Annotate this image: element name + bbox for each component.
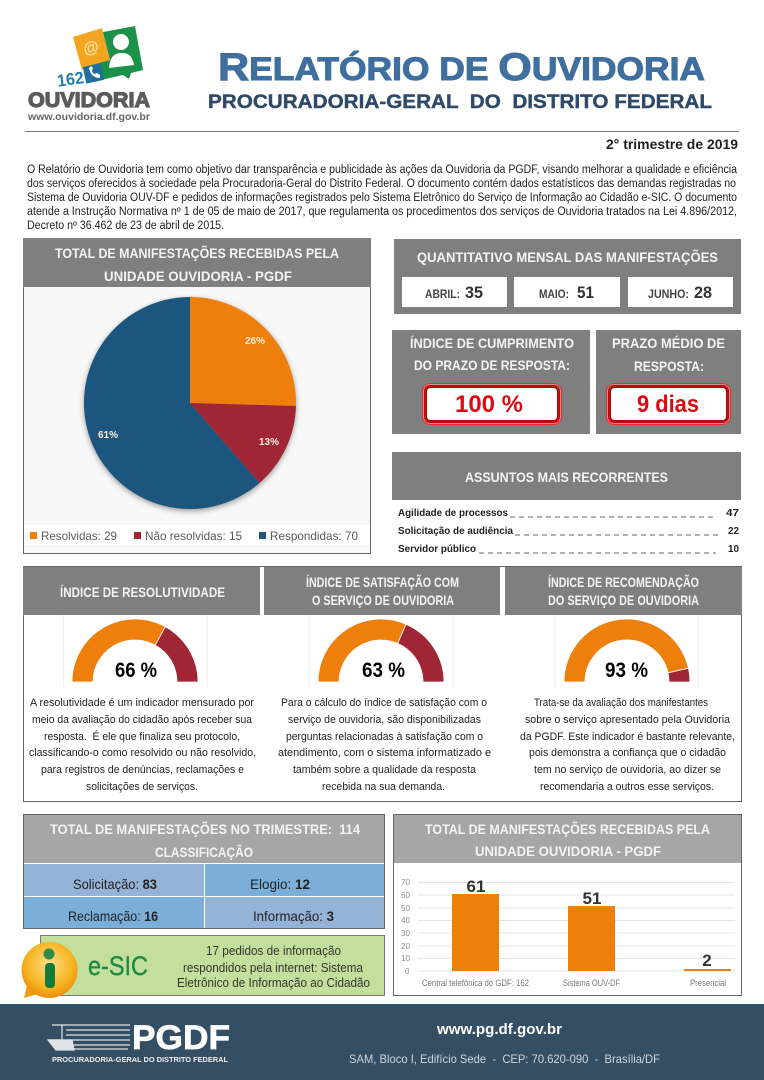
icon: PGDF building bbox=[48, 1025, 130, 1050]
panel: recurring subjects: 47 bbox=[726, 508, 740, 519]
panel: bar chart by channel: TOTAL DE MANIFESTAÇÕES RECEBIDAS PELA bbox=[425, 820, 710, 837]
text: resolution description: solicitações de serviços. bbox=[86, 781, 198, 793]
footer: SAM, Bloco I, Edifício Sede - CEP: 70.620-090 - Brasília/DF bbox=[349, 1052, 660, 1066]
panel: recommendation index: DO SERVIÇO DE OUVIDORIA bbox=[548, 592, 699, 608]
panel: quarter total and classification bbox=[24, 814, 384, 928]
panel: monthly quantity: 35 bbox=[465, 283, 483, 302]
panel: recommendation index bbox=[505, 567, 742, 793]
panel: average response time: RESPOSTA: bbox=[634, 358, 704, 374]
panel: satisfaction index: ÍNDICE DE SATISFAÇÃO COM bbox=[306, 573, 459, 590]
panel: deadline compliance: ÍNDICE DE CUMPRIMENTO bbox=[410, 335, 574, 351]
y axis labels: 40 bbox=[401, 916, 410, 925]
y axis labels: 0 bbox=[405, 967, 410, 976]
bar values bbox=[467, 877, 712, 970]
text: resolution description: meio da avaliação do cidadão após receber sua bbox=[32, 714, 253, 726]
text: e-SIC requests bbox=[177, 944, 370, 990]
footer: PGDF bbox=[132, 1019, 230, 1057]
panel: resolution index: 66 % bbox=[115, 659, 157, 682]
panel: pie chart of manifestations bbox=[23, 238, 371, 554]
panel: bar chart by channel: UNIDADE OUVIDORIA - PGDF bbox=[475, 843, 661, 859]
text: e-SIC requests: 17 pedidos de informação bbox=[206, 944, 341, 958]
x axis labels: Presencial bbox=[690, 978, 726, 988]
text: recommendation description: Trata-se da avaliação dos manifestantes bbox=[534, 697, 708, 709]
logo: Ouvidoria 162 bbox=[27, 26, 150, 123]
bar values: 2 bbox=[702, 951, 712, 970]
text: e-SIC requests: Eletrônico de Informação ao Cidadão bbox=[177, 976, 370, 990]
text: satisfaction description bbox=[278, 697, 491, 793]
text: resolution description: resposta. É ele que finaliza seu protocolo, bbox=[44, 730, 240, 743]
subtitle: PROCURADORIA-GERAL DO DISTRITO FEDERAL bbox=[208, 92, 712, 113]
pie legend bbox=[24, 525, 370, 545]
logo: Ouvidoria 162: www.ouvidoria.df.gov.br bbox=[27, 111, 150, 123]
pie labels: 61% bbox=[98, 430, 118, 441]
heading: pie panel: UNIDADE OUVIDORIA - PGDF bbox=[104, 268, 292, 284]
text: recommendation description: pois demonstra a confiança que o cidadão bbox=[529, 747, 726, 759]
panel: quarter total and classification: TOTAL DE MANIFESTAÇÕES NO TRIMESTRE: 114 bbox=[50, 820, 360, 837]
panel: satisfaction index: 63 % bbox=[362, 659, 405, 682]
logo: Ouvidoria 162: @ bbox=[81, 38, 101, 58]
footer bbox=[0, 1004, 764, 1080]
pie legend: Não resolvidas: 15 bbox=[145, 529, 242, 543]
text: recommendation description: da PGDF. Este indicador é bastante relevante, bbox=[520, 731, 735, 743]
text: satisfaction description: atendimento, com o sistema informatizado e bbox=[278, 747, 491, 759]
text: resolution description: classificando-o como resolvido ou não resolvido, bbox=[29, 747, 256, 759]
text: resolution description: A resolutividade é um indicador mensurado por bbox=[30, 697, 254, 709]
panel: recurring subjects: Solicitação de audiência bbox=[398, 526, 513, 537]
intro text: Decreto nº 36.462 de 23 de abril de 2015. bbox=[27, 220, 224, 232]
panel: satisfaction index bbox=[264, 567, 500, 793]
pie labels: 13% bbox=[259, 437, 279, 448]
panel: recommendation index: ÍNDICE DE RECOMENDAÇÃO bbox=[548, 573, 699, 590]
text: resolution description: para registros de denúncias, reclamações e bbox=[41, 764, 244, 776]
panel: recurring subjects: ASSUNTOS MAIS RECORRENTES bbox=[465, 469, 668, 485]
y axis labels: 10 bbox=[401, 954, 410, 963]
heading: pie panel bbox=[23, 238, 371, 287]
y axis labels bbox=[401, 878, 410, 976]
gauge: 66% bbox=[72, 619, 198, 682]
classification table bbox=[24, 864, 384, 928]
y axis labels: 70 bbox=[401, 878, 410, 887]
y axis labels: 60 bbox=[401, 891, 410, 900]
panel: quarter total and classification: CLASSIFICAÇÃO bbox=[155, 843, 253, 860]
panel: deadline compliance bbox=[392, 330, 590, 434]
text: recommendation description: tem no serviço de ouvidoria, ao dizer se bbox=[534, 764, 721, 776]
footer: www.pg.df.gov.br bbox=[436, 1021, 562, 1038]
y axis labels: 30 bbox=[401, 929, 410, 938]
x axis labels bbox=[422, 978, 726, 988]
text: recommendation description: sobre o serviço apresentado pela Ouvidoria bbox=[525, 714, 731, 726]
text: satisfaction description: serviço de ouvidoria, são disponibilizadas bbox=[288, 714, 481, 726]
logo: Ouvidoria 162: 162 bbox=[56, 68, 85, 91]
bar values: 61 bbox=[467, 877, 485, 896]
panel: recommendation index: 93 % bbox=[605, 659, 648, 682]
x axis labels: Sistema OUV-DF bbox=[563, 978, 620, 988]
panel: recurring subjects: 10 bbox=[728, 544, 739, 555]
panel: recurring subjects: 22 bbox=[728, 526, 739, 537]
panel: recurring subjects: Agilidade de processos bbox=[398, 508, 508, 519]
panel: deadline compliance: 100 % bbox=[455, 391, 523, 418]
title: RELATÓRIO DE OUVIDORIA bbox=[218, 46, 705, 89]
bars bbox=[452, 894, 731, 971]
panel: satisfaction index: O SERVIÇO DE OUVIDORIA bbox=[312, 592, 454, 608]
panel: e-SIC: e-SIC bbox=[88, 951, 148, 981]
intro text bbox=[27, 164, 738, 232]
panel: bar chart by channel bbox=[394, 814, 742, 996]
panel: resolution index: ÍNDICE DE RESOLUTIVIDADE bbox=[60, 584, 225, 600]
logo: Ouvidoria 162: OUVIDORIA bbox=[28, 89, 150, 112]
text: satisfaction description: Para o cálculo do índice de satisfação com o bbox=[281, 697, 487, 709]
text: e-SIC requests: respondidos pela internet: Sistema bbox=[183, 961, 363, 975]
panel: monthly quantity: 51 bbox=[577, 283, 594, 302]
panel: resolution index bbox=[23, 567, 260, 793]
pie labels: 26% bbox=[245, 336, 265, 347]
y axis labels: 20 bbox=[401, 942, 410, 951]
pie labels bbox=[98, 336, 279, 448]
panel: average response time: 9 dias bbox=[637, 391, 699, 418]
classification table: Elogio: 12 bbox=[250, 876, 310, 892]
period label: 2° trimestre de 2019 bbox=[606, 136, 738, 152]
y axis labels: 50 bbox=[401, 904, 410, 913]
panel: monthly quantity: ABRIL: bbox=[425, 287, 460, 301]
panel: e-SIC bbox=[22, 936, 384, 998]
text: recommendation description bbox=[520, 697, 735, 793]
panel: monthly quantity bbox=[394, 239, 741, 314]
text: satisfaction description: também sobre a qualidade da resposta bbox=[293, 764, 477, 776]
text: satisfaction description: perguntas relacionadas à satisfação com o bbox=[286, 731, 483, 743]
panel: deadline compliance: DO PRAZO DE RESPOSTA: bbox=[414, 357, 570, 373]
footer: PROCURADORIA-GERAL DO DISTRITO FEDERAL bbox=[52, 1057, 229, 1064]
text: resolution description bbox=[29, 697, 256, 793]
heading: pie panel: TOTAL DE MANIFESTAÇÕES RECEBIDAS PELA bbox=[55, 244, 339, 261]
bar values: 51 bbox=[583, 889, 601, 908]
panel: monthly quantity: MAIO: bbox=[539, 287, 569, 301]
x axis labels: Central telefônica do GDF: 162 bbox=[422, 978, 529, 988]
classification table: Informação: 3 bbox=[253, 908, 334, 924]
panel: recurring subjects: Servidor público bbox=[398, 544, 476, 555]
pie legend: Respondidas: 70 bbox=[270, 529, 358, 543]
panel: average response time bbox=[596, 330, 741, 434]
gauge: 93% bbox=[564, 619, 690, 682]
panel: monthly quantity: QUANTITATIVO MENSAL DAS MANIFESTAÇÕES bbox=[417, 248, 718, 265]
text: satisfaction description: recebida na sua demanda. bbox=[322, 781, 445, 793]
pie legend: Resolvidas: 29 bbox=[41, 529, 117, 543]
panel: monthly quantity: JUNHO: bbox=[648, 287, 689, 301]
panel: recurring subjects bbox=[392, 452, 741, 555]
panel: average response time: PRAZO MÉDIO DE bbox=[612, 335, 725, 351]
pie slices bbox=[84, 297, 296, 509]
text: recommendation description: recomendaria a outros esse serviços. bbox=[540, 781, 714, 793]
gauge: 63% bbox=[318, 619, 444, 682]
icon: information balloon bbox=[22, 942, 78, 998]
panel: monthly quantity: 28 bbox=[694, 283, 712, 302]
classification table: Reclamação: 16 bbox=[68, 908, 158, 924]
classification table: Solicitação: 83 bbox=[73, 876, 157, 892]
